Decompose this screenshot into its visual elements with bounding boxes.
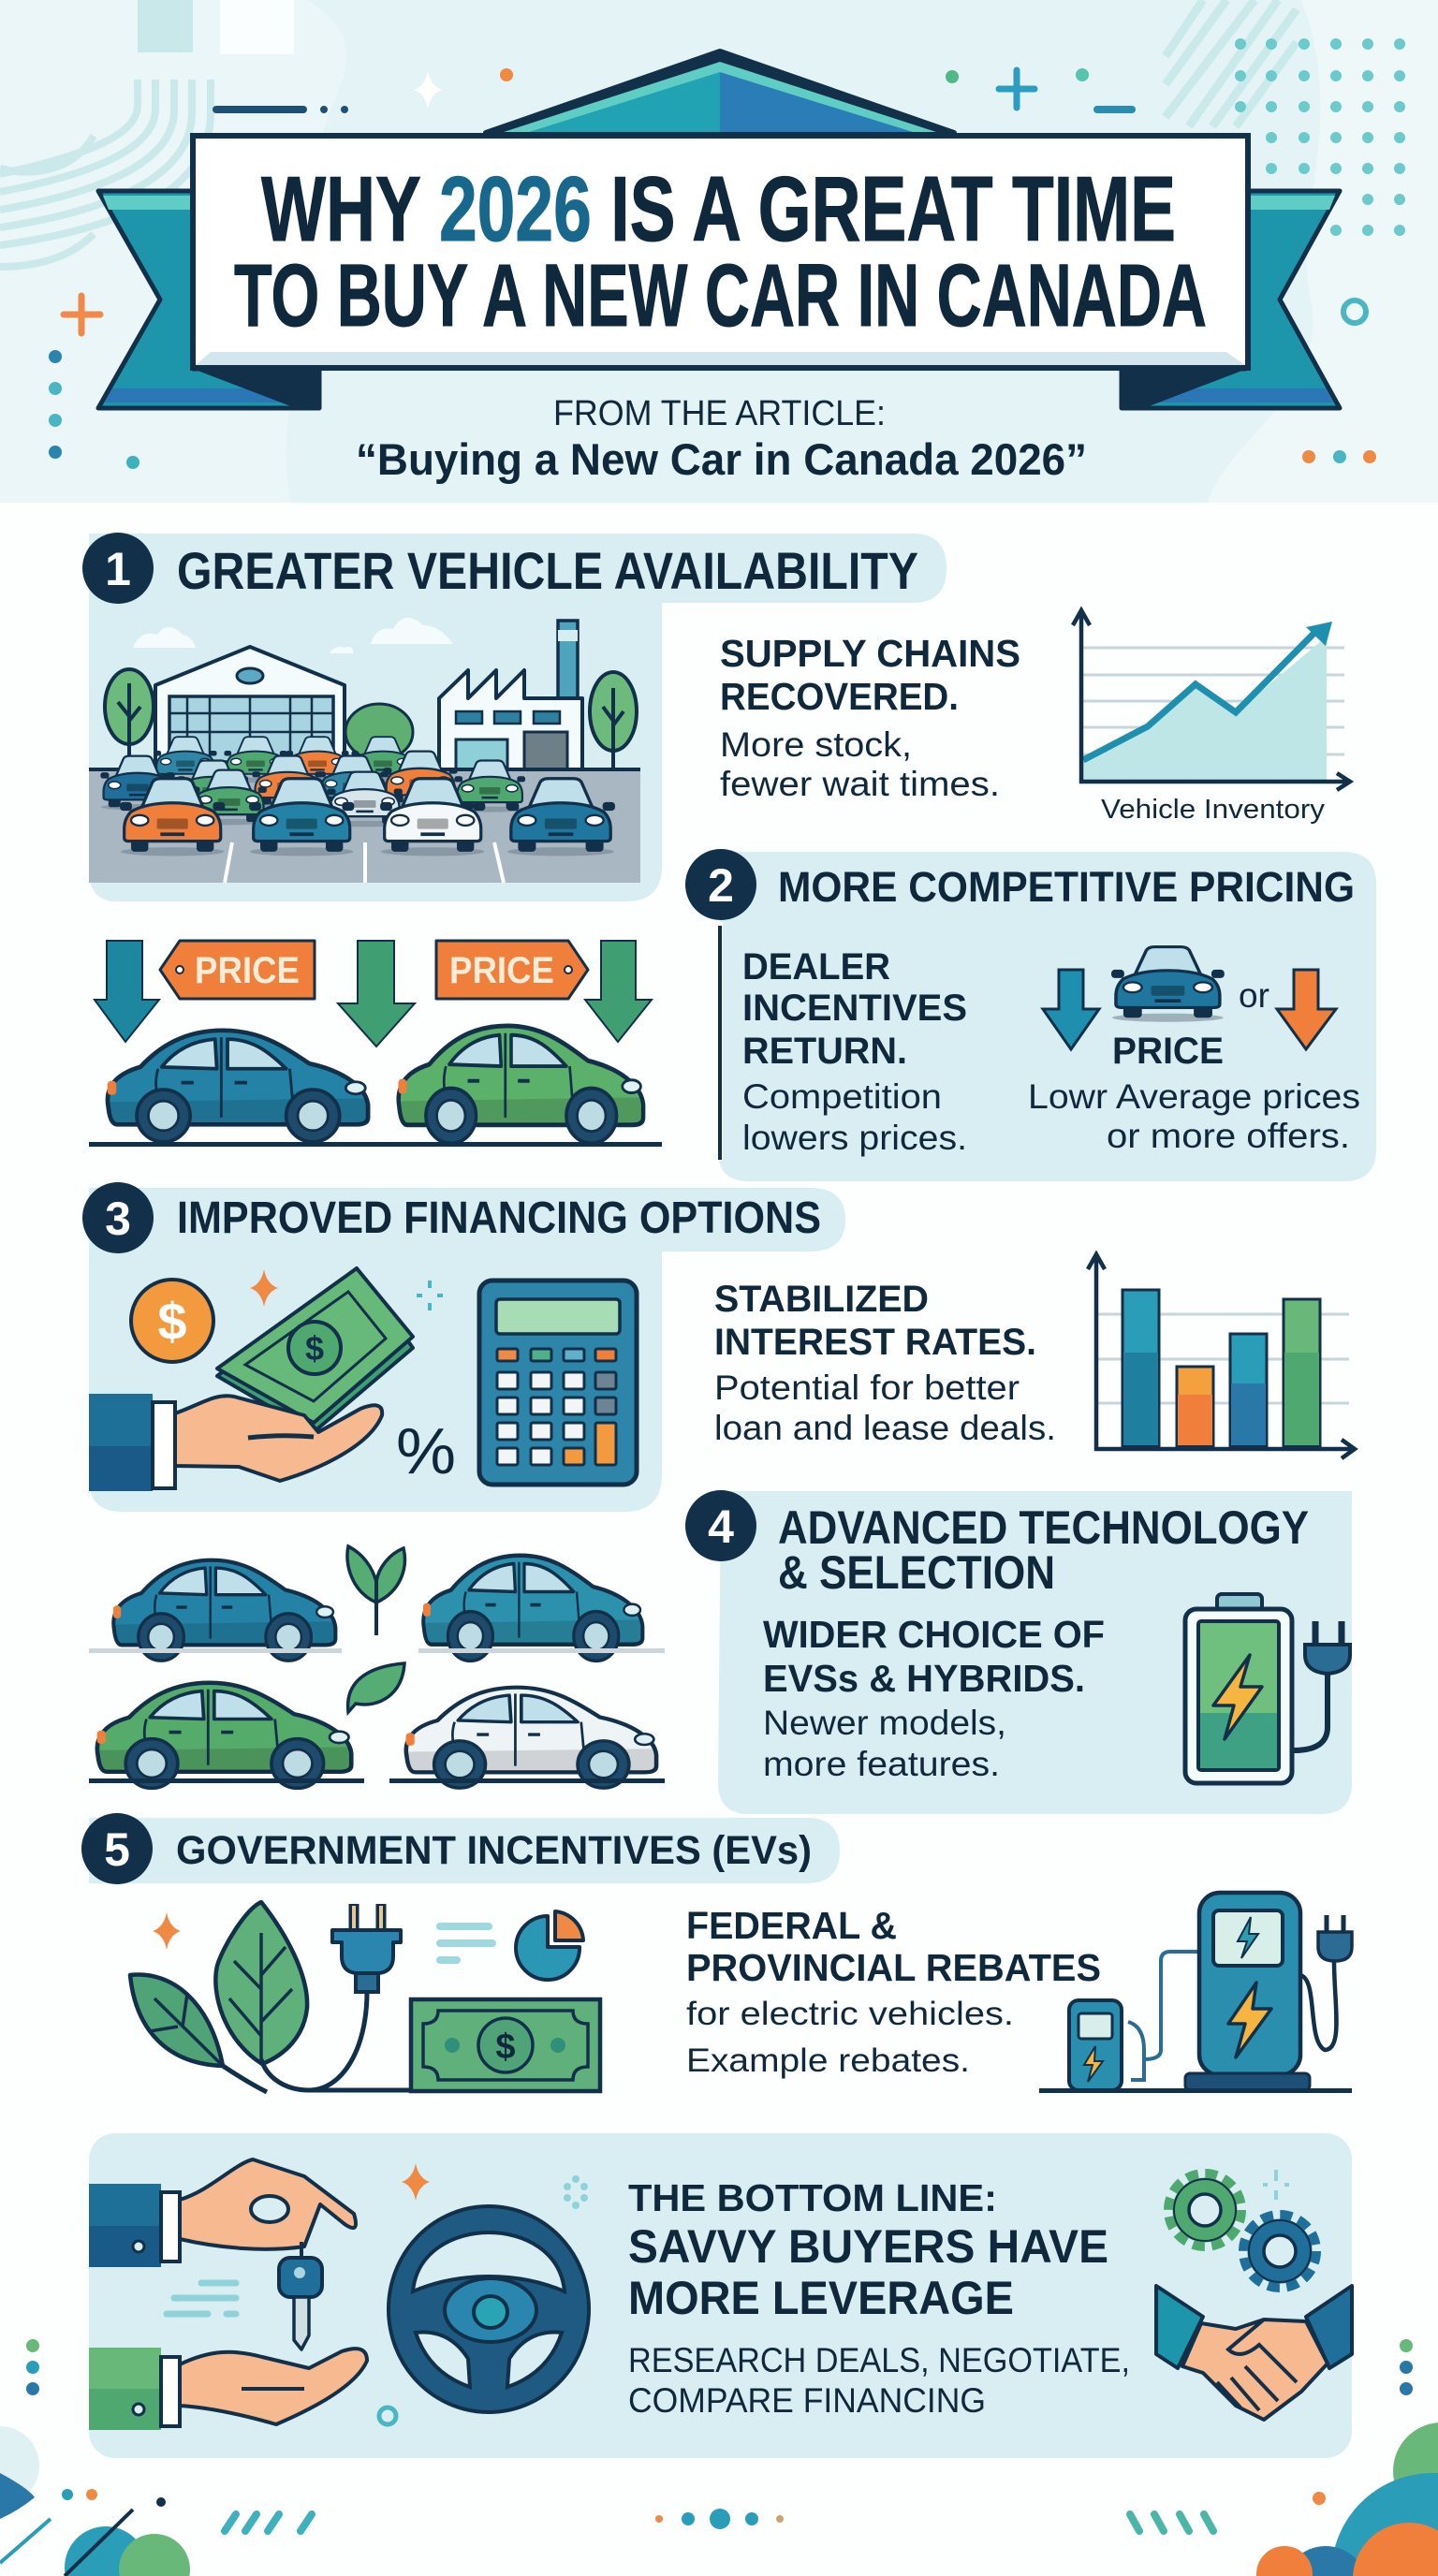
white gap behind divider [712,922,723,1161]
badge 3 [82,1182,154,1253]
text: supply chains: RECOVERED. [720,675,959,718]
icon: small plus [417,1281,443,1310]
text: dealer incentives: INCENTIVES [742,988,967,1029]
text: supply chains: fewer wait times. [720,765,1000,803]
text: federal rebates: FEDERAL & [686,1904,897,1947]
heading 4: & SELECTION [778,1546,1055,1599]
leaves [347,1546,404,1712]
panel: section 2 [685,849,1376,1181]
text: bottom line: RESEARCH DEALS, NEGOTIATE, [628,2341,1130,2379]
chart: interest bars [1088,1254,1355,1458]
text: wider choice: WIDER CHOICE OF [763,1613,1105,1656]
panel background [89,2133,1352,2458]
badge 5 [81,1813,153,1884]
icon: small lines [440,1926,492,1960]
text: federal rebates: Example rebates. [686,2042,970,2079]
price tags: PRICE [449,950,554,991]
text: dealer incentives: RETURN. [742,1031,907,1072]
text: dealer incentives: Competition [742,1077,942,1116]
car top right [423,1556,642,1661]
illustration: leaves plug and cash [130,1902,600,2092]
text: bottom line: THE BOTTOM LINE: [628,2176,997,2219]
pill background 5 [89,1818,840,1883]
panel: bottom line [89,2133,1352,2458]
title text [234,157,1207,345]
heading 1: GREATER VEHICLE AVAILABILITY [177,541,918,600]
badge 3: 3 [105,1193,131,1245]
text: wider choice: Newer models, [763,1704,1006,1742]
icon: percent: % [396,1414,456,1487]
icon: coin [131,1280,213,1362]
text: wider choice: EVSs & HYBRIDS. [763,1657,1085,1700]
text: dealer incentives: DEALER [742,946,890,988]
factory [439,621,582,772]
dealership scene [89,618,640,883]
title banner [98,51,1340,408]
icon: plug and cable [261,1904,412,2090]
icon: handshake [1156,2286,1352,2420]
icon: small dots [1263,2170,1289,2200]
panel: section 1 [82,533,946,901]
heading 3: IMPROVED FINANCING OPTIONS [177,1193,821,1243]
title text: WHY 2026 IS A GREAT TIME [261,157,1176,260]
dealership building [155,647,345,772]
footer decoration right [1256,2422,1438,2576]
text: stabilized interest rates: loan and lease deals. [714,1409,1056,1447]
divider [718,926,722,1160]
heading 5: GOVERNMENT INCENTIVES (EVs) [176,1828,812,1873]
icon: banknote [411,1999,600,2091]
icon: banknotes [217,1268,413,1432]
banner roof [486,51,954,133]
icon: sparkle [402,2163,430,2201]
footer decoration left [0,2426,190,2576]
icon: sparkle [153,1912,181,1950]
car bottom right [406,1688,656,1788]
text: dealer incentives [742,946,967,1157]
car top left [113,1560,335,1661]
panel: section 5 heading [81,1813,840,1884]
price tags [160,941,588,999]
icon: coin: $ [157,1292,187,1351]
icon: sparkle [250,1269,278,1307]
icon: steering wheel [389,2206,589,2412]
illustration: EV and hybrid cars [89,1546,665,1788]
text: average prices [1028,1077,1360,1155]
back row cars [100,737,525,827]
text: average prices: Lowr Average prices [1028,1077,1360,1116]
text: federal rebates [686,1904,1101,2079]
panel background 1 [89,534,946,901]
icon: price down: or [1239,976,1269,1015]
heading 2: MORE COMPETITIVE PRICING [778,863,1355,911]
subtitle: “Buying a New Car in Canada 2026” [356,434,1087,484]
text: supply chains: More stock, [720,725,912,764]
price drop illustration [89,941,662,1147]
badge 1: 1 [105,543,131,595]
text: supply chains: SUPPLY CHAINS [720,632,1020,675]
side dots [26,2339,1413,2395]
header dot grid [1235,38,1405,236]
icon: ring [379,2408,396,2424]
badge 5: 5 [104,1823,130,1876]
icon: battery and plug [1185,1594,1350,1783]
blue sedan [108,1031,368,1142]
front row cars [120,779,615,856]
header background [0,0,1438,503]
subtitle: FROM THE ARTICLE: [553,394,886,433]
heading 4: ADVANCED TECHNOLOGY [778,1501,1309,1554]
badge 2 [685,849,756,920]
bush [345,704,413,760]
chart label: Vehicle Inventory [1101,795,1326,825]
icon: price down: PRICE [1112,1031,1224,1072]
text: supply chains [720,632,1020,803]
icon: banknote: $ [495,2027,516,2067]
icon: EV charging station [1039,1893,1352,2093]
left ribbon [98,191,319,408]
text: dealer incentives: lowers prices. [742,1119,967,1157]
car bottom left [97,1683,351,1788]
parking lot [89,768,640,883]
panel background 3 [89,1188,845,1512]
text: stabilized interest rates [714,1279,1056,1447]
badge 1 [82,533,154,604]
icon: calculator [479,1281,637,1485]
right ribbon [1122,191,1340,408]
panel: section 3 [82,1182,845,1512]
text: wider choice: more features. [763,1745,1000,1783]
icon: motion lines [167,2283,236,2314]
text: stabilized interest rates: INTEREST RATES. [714,1322,1036,1363]
badge 4: 4 [708,1500,734,1553]
panel background 2 [718,852,1376,1181]
icon: hand holding key [89,2159,356,2267]
icon: dots [564,2175,588,2209]
text: bottom line [628,2176,1130,2420]
ground lines [89,1648,665,1783]
green sedan [398,1026,643,1143]
panel background 4 [718,1491,1352,1814]
header accents [49,68,1376,469]
text: stabilized interest rates: STABILIZED [714,1279,929,1320]
badge 2: 2 [708,859,734,912]
icon: gears [1171,2176,1313,2285]
arrows [95,941,652,1046]
icon: hand with cuff [89,1394,382,1491]
trees [105,669,637,772]
footer decoration centre [225,2509,1213,2531]
text: wider choice [763,1613,1105,1783]
text: bottom line: COMPARE FINANCING [628,2381,986,2420]
icon: pie chart [516,1911,583,1980]
badge 4 [685,1490,756,1561]
text: bottom line: SAVVY BUYERS HAVE [628,2220,1108,2273]
price tags: PRICE [195,950,300,991]
heading 4 [778,1501,1309,1599]
banner panel [193,136,1248,368]
road line [89,1142,662,1147]
icon: leaves [130,1902,307,2092]
icon: banknotes: $ [305,1329,324,1368]
clouds [133,618,453,653]
text: federal rebates: PROVINCIAL REBATES [686,1946,1101,1989]
text: stabilized interest rates: Potential for better [714,1368,1020,1407]
subtitle [356,394,1087,484]
icon: car key [279,2258,322,2349]
panel: section 4 [685,1490,1352,1814]
icon: price down [1043,947,1336,1072]
chart: vehicle inventory [1073,610,1350,825]
text: average prices: or more offers. [1107,1117,1350,1155]
text: bottom line: MORE LEVERAGE [628,2272,1014,2324]
icon: open hand [89,2348,367,2430]
text: federal rebates: for electric vehicles. [686,1996,1014,2032]
